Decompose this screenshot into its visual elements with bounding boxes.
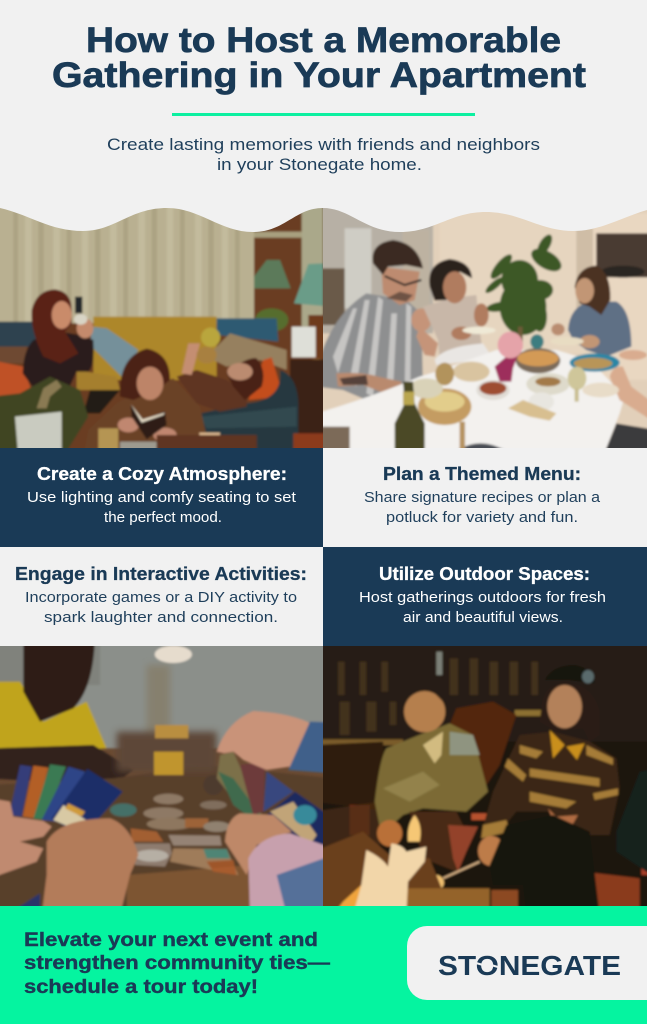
panel: create a cozy atmosphere <box>0 448 323 547</box>
title: How to Host a Memorable <box>86 21 561 60</box>
photo: friends sharing a meal at a table <box>323 208 647 448</box>
logo card <box>407 926 647 1000</box>
panel: create a cozy atmosphere: Use lighting and comfy seating to set <box>27 489 297 506</box>
chair arm <box>448 825 478 872</box>
marshmallow and stick <box>443 862 480 878</box>
panel: utilize outdoor spaces <box>323 547 647 646</box>
woman centre <box>423 295 483 360</box>
panel: engage in interactive activities: Incorporate games or a DIY activity to <box>25 589 297 606</box>
table <box>316 350 625 457</box>
call to action: schedule a tour today! <box>24 977 258 998</box>
panel: create a cozy atmosphere: Create a Cozy Atmosphere: <box>37 464 287 484</box>
boy <box>375 723 488 835</box>
subtitle <box>107 135 540 174</box>
table <box>0 768 323 906</box>
hands right <box>217 711 313 770</box>
subtitle: Create lasting memories with friends and neighbors <box>107 135 540 154</box>
panel: utilize outdoor spaces: Host gatherings outdoors for fresh <box>359 589 606 606</box>
cards right <box>217 752 263 820</box>
call to action: strengthen community ties— <box>24 953 330 974</box>
call to action <box>24 930 330 998</box>
photo: friends relaxing on a sofa <box>0 208 323 448</box>
panel: utilize outdoor spaces: Utilize Outdoor Spaces: <box>379 564 590 584</box>
panel: engage in interactive activities: Engage in Interactive Activities: <box>15 564 307 584</box>
footer band <box>0 906 647 1024</box>
photo: friends toasting marshmallows by a fire <box>313 635 647 915</box>
girl <box>480 732 620 838</box>
cards left <box>9 765 32 817</box>
panel: plan a themed menu: potluck for variety and fun. <box>386 509 578 526</box>
subtitle: in your Stonegate home. <box>217 155 422 174</box>
title: Gathering in Your Apartment <box>52 56 586 95</box>
man left <box>316 293 423 400</box>
call to action: Elevate your next event and <box>24 930 318 951</box>
panel: plan a themed menu <box>323 448 647 547</box>
wave-shaped header background <box>0 0 647 232</box>
panel: create a cozy atmosphere: the perfect mood. <box>104 509 222 526</box>
panel: engage in interactive activities: spark laughter and connection. <box>44 609 278 626</box>
flames <box>408 815 421 842</box>
panel: plan a themed menu: Share signature recipes or plan a <box>364 489 601 506</box>
woman left <box>22 332 95 388</box>
panel: engage in interactive activities <box>0 547 323 646</box>
photo: friends playing a card game <box>0 646 323 906</box>
title <box>52 21 586 95</box>
plant <box>483 232 565 335</box>
man right <box>568 302 631 357</box>
panel: utilize outdoor spaces: air and beautiful views. <box>403 609 563 626</box>
panel: plan a themed menu: Plan a Themed Menu: <box>383 464 581 484</box>
food and dishes <box>516 348 560 373</box>
title divider <box>172 113 475 116</box>
hands left <box>0 798 52 878</box>
logo: Stonegate wordmark: STONEGATE <box>438 950 621 981</box>
woman reclining <box>177 370 247 412</box>
plant and pot <box>0 377 88 457</box>
woman reading <box>170 378 206 427</box>
